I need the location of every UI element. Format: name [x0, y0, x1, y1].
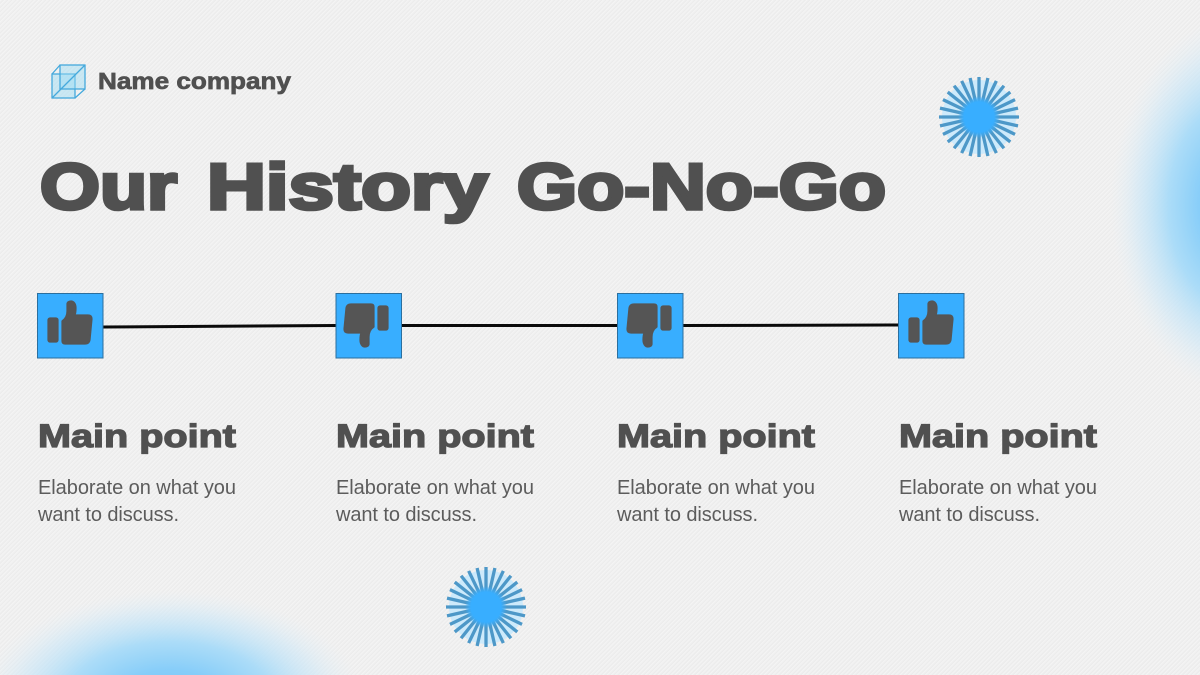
- milestone 3: thumbs down: [618, 294, 683, 358]
- point 3 text: Elaborate on what you: [617, 477, 815, 499]
- title: Our: [40, 150, 177, 223]
- point 4 text: Elaborate on what you: [899, 477, 1097, 499]
- point 4 text: Main point: [899, 418, 1097, 454]
- point 4 text: [898, 418, 1097, 526]
- milestone 1: thumbs up: [38, 294, 103, 358]
- point 1 text: [37, 418, 236, 526]
- point 1 text: Main point: [38, 418, 236, 454]
- timeline connector line: [103, 325, 898, 327]
- point 4 text: want to discuss.: [898, 504, 1040, 526]
- point 3 text: [616, 418, 815, 526]
- point 2 text: Elaborate on what you: [336, 477, 534, 499]
- milestone 2: thumbs down: [336, 294, 402, 358]
- point 2 text: Main point: [336, 418, 534, 454]
- point 3 text: Main point: [617, 418, 815, 454]
- milestone 4: thumbs up: [898, 294, 964, 358]
- title: Go-No-Go: [517, 150, 886, 223]
- decorative glow: bottom left: [0, 585, 370, 675]
- title: History: [207, 150, 488, 223]
- sunburst: top right: [939, 77, 1019, 157]
- point 1 text: want to discuss.: [37, 504, 179, 526]
- decorative glow: right edge: [1100, 10, 1200, 410]
- point 2 text: want to discuss.: [335, 504, 477, 526]
- company name: Name company: [98, 68, 291, 94]
- point 1 text: Elaborate on what you: [38, 477, 236, 499]
- logo icon: [52, 65, 85, 98]
- title: [40, 150, 886, 223]
- point 3 text: want to discuss.: [616, 504, 758, 526]
- point 2 text: [335, 418, 534, 526]
- sunburst: bottom center: [446, 567, 526, 647]
